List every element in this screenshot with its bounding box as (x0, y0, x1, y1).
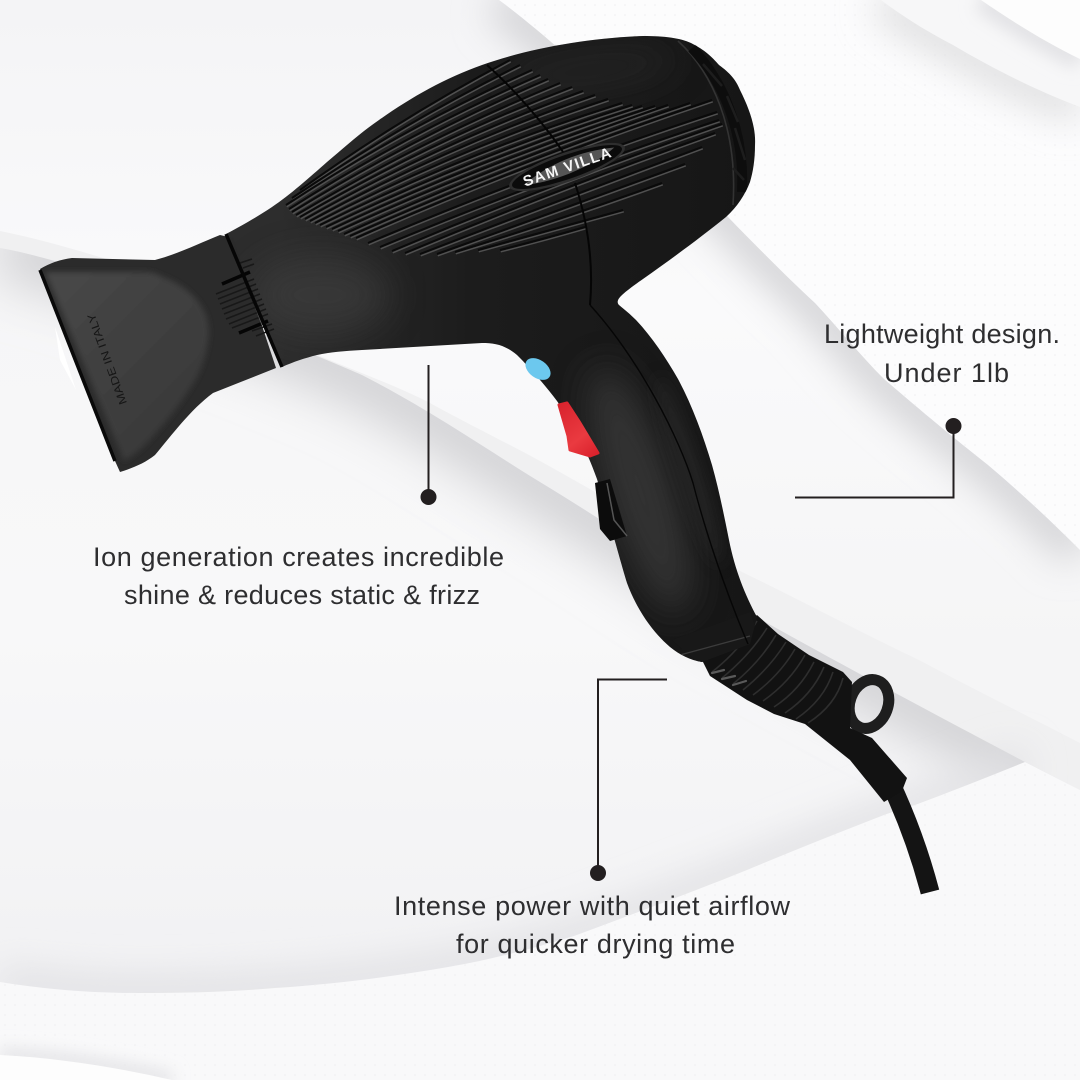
power cord (890, 782, 930, 892)
product: hair dryer (40, 36, 930, 892)
icon: slide switch (595, 479, 627, 541)
ribbed grille lines (286, 60, 723, 256)
icon: blue ion button (521, 354, 555, 384)
callout text: lightweight design: Under 1lb (884, 358, 1009, 388)
callout text: ion generation (93, 542, 504, 610)
moulded text: MADE IN ITALY (85, 311, 130, 406)
callout text: intense power: Intense power with quiet airflow (394, 891, 790, 921)
strain relief with hanging loop (702, 615, 907, 802)
logo badge: SAM VILLA (521, 144, 614, 190)
callout: intense power leader line (590, 680, 667, 881)
dryer body and handle (226, 36, 760, 668)
concentrator nozzle (40, 234, 282, 472)
callout: lightweight leader line (795, 418, 962, 498)
callout text: lightweight design (824, 319, 1060, 388)
callout text: lightweight design: Lightweight design. (824, 319, 1060, 349)
nozzle collar ribs (216, 259, 274, 336)
rear filter cap (678, 41, 734, 205)
logo badge (505, 133, 629, 201)
callout text: ion generation: Ion generation creates incredible (93, 542, 504, 572)
callout text: intense power: for quicker drying time (456, 929, 735, 959)
callout text: intense power (394, 891, 790, 959)
callout: ion generation leader line (420, 365, 436, 505)
callout text: ion generation: shine & reduces static & frizz (124, 580, 480, 610)
icon: red cool-shot trigger (559, 403, 598, 456)
